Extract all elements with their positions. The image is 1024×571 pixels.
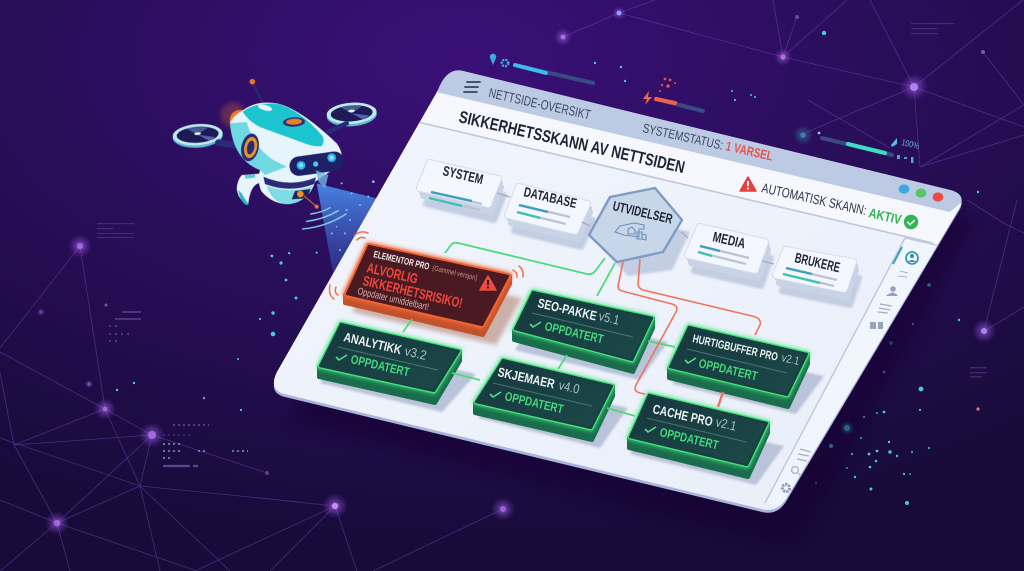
scan beam bbox=[271, 180, 377, 293]
camera bbox=[292, 189, 319, 209]
floating status widgets bbox=[490, 54, 920, 163]
alert card: elementor pro: SIKKERHETSRISIKO! bbox=[361, 272, 464, 311]
card: skjemaer: SKJEMAER bbox=[496, 364, 557, 392]
alert card: elementor pro: ALVORLIG bbox=[365, 259, 420, 287]
antenna bbox=[249, 79, 265, 107]
panel drop shadow bbox=[290, 100, 975, 543]
particles bbox=[104, 31, 980, 505]
system status: SYSTEMSTATUS: bbox=[641, 120, 725, 153]
hamburger icon bbox=[464, 82, 480, 92]
icon: active check bbox=[904, 215, 918, 229]
card: cache pro bbox=[629, 395, 784, 485]
alert card: elementor pro: (Gammel versjon) bbox=[432, 263, 479, 282]
card: database: DATABASE bbox=[522, 184, 578, 211]
card: analytikk: v3.2 bbox=[403, 343, 428, 363]
card: hurtigbuffer pro: v2.1 bbox=[780, 352, 801, 368]
card: hurtigbuffer pro: HURTIGBUFFER PRO bbox=[691, 333, 779, 364]
card: seo-pakke: SEO-PAKKE bbox=[536, 295, 598, 323]
title: SIKKERHETSSKANN AV NETTSIDEN bbox=[457, 107, 687, 177]
card: users: BRUKERE bbox=[793, 249, 842, 275]
icon: plugin boxes bbox=[615, 223, 646, 240]
automatic scan status: AKTIV bbox=[867, 205, 903, 227]
card: media: MEDIA bbox=[711, 228, 747, 251]
card: hurtigbuffer pro: OPPDATERT bbox=[697, 356, 759, 383]
card: analytikk bbox=[319, 324, 476, 412]
card: cache pro: v2.1 bbox=[714, 414, 738, 434]
card: users bbox=[776, 249, 859, 305]
window dots bbox=[899, 184, 943, 202]
beam emitter bbox=[316, 170, 328, 188]
icon: warning triangle bbox=[740, 177, 756, 191]
rotor right bbox=[326, 101, 378, 128]
card: seo-pakke: OPPDATERT bbox=[543, 319, 605, 346]
floating status widgets: 100% bbox=[901, 137, 920, 151]
system status: 1 VARSEL bbox=[724, 138, 775, 164]
automatic scan status: AUTOMATISK SKANN: bbox=[760, 180, 868, 218]
cyan side shell bbox=[230, 122, 287, 175]
card: seo-pakke: v5.1 bbox=[597, 308, 621, 328]
arms bbox=[218, 123, 347, 147]
card: skjemaer: v4.0 bbox=[557, 377, 581, 397]
card: skjemaer: OPPDATERT bbox=[503, 389, 565, 416]
drone body bbox=[230, 102, 342, 204]
system status bbox=[641, 120, 775, 164]
card: analytikk: OPPDATERT bbox=[349, 352, 411, 379]
card: database bbox=[508, 184, 593, 247]
card: hurtigbuffer pro bbox=[669, 327, 824, 414]
rear light bbox=[221, 102, 246, 128]
card: cache pro: OPPDATERT bbox=[658, 425, 720, 452]
side fin bbox=[237, 173, 264, 203]
card: cache pro: CACHE PRO bbox=[651, 401, 714, 429]
card: seo-pakke bbox=[514, 292, 668, 380]
card: system bbox=[420, 162, 504, 220]
signal marks bbox=[330, 232, 523, 299]
side ring bbox=[239, 132, 261, 163]
alert card: elementor pro: ELEMENTOR PRO bbox=[372, 249, 430, 273]
hub: extensions bbox=[589, 188, 690, 276]
top shell bbox=[243, 104, 324, 146]
connectors bbox=[403, 193, 774, 416]
small data readouts bbox=[97, 23, 987, 466]
visor bbox=[288, 150, 345, 177]
panel: website overview window bbox=[274, 70, 962, 513]
rotor left bbox=[172, 122, 223, 149]
card: analytikk: ANALYTIKK bbox=[342, 329, 404, 357]
icon: alert triangle bbox=[480, 276, 496, 290]
top hatch bbox=[283, 117, 305, 127]
alert card: elementor pro bbox=[330, 232, 523, 345]
hub: extensions: UTVIDELSER bbox=[611, 198, 674, 227]
scanner drone bbox=[172, 79, 378, 229]
scan waves bbox=[303, 208, 346, 229]
sidebar icons bbox=[782, 247, 918, 492]
card: skjemaer bbox=[475, 360, 628, 448]
panel surface bbox=[274, 70, 962, 510]
body band bbox=[263, 177, 316, 189]
card: media bbox=[688, 227, 771, 286]
card: system: SYSTEM bbox=[441, 162, 485, 187]
alert card: elementor pro: Oppdater umiddelbart! bbox=[356, 286, 430, 313]
panel edge bbox=[274, 72, 962, 513]
header: website overview: NETTSIDE-OVERSIKT bbox=[487, 85, 592, 122]
